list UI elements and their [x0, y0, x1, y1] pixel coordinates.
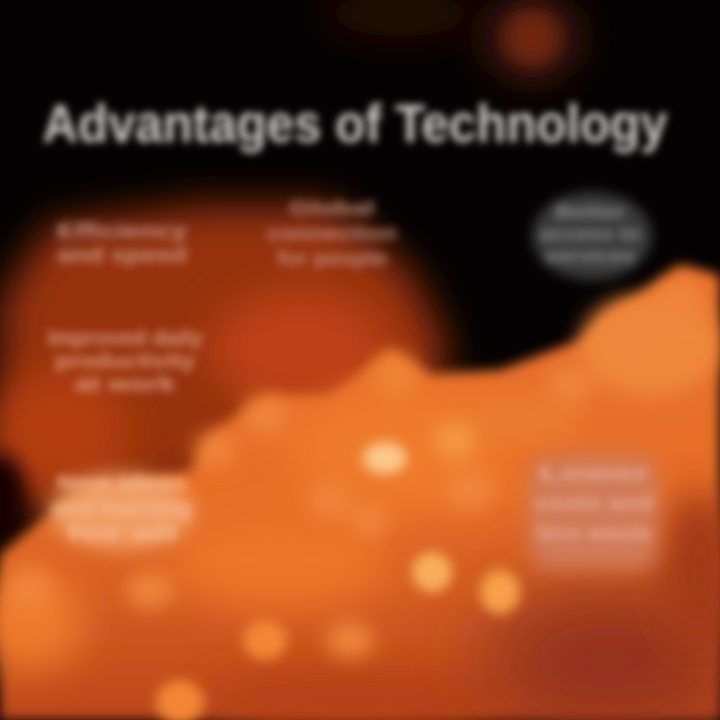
panel: advantage 5 [50, 472, 194, 550]
bright spots [156, 353, 520, 720]
panel: advantage 3 (grey circle): Better [555, 202, 625, 222]
glow: top sun [482, 0, 582, 83]
panel: advantage 4: at work [75, 373, 175, 396]
dark corner left [0, 455, 26, 545]
panel: advantage 5: New ideas [57, 472, 187, 495]
panel: advantage 3 (grey circle): access to [540, 224, 640, 244]
panel: advantage 2 [267, 198, 397, 270]
panel: advantage 1: and speed [57, 244, 187, 267]
panel: advantage 1 [57, 220, 187, 267]
mottled embers [8, 278, 704, 658]
title: Advantages of Technology [42, 94, 668, 154]
panel: advantage 4: Improved daily [48, 327, 203, 350]
panel: advantage 2: connection [267, 223, 397, 245]
panel: advantage 2: for people [277, 248, 387, 270]
panel: advantage 6: less waste [536, 522, 652, 545]
panel: advantage 6 [530, 455, 658, 570]
panel: advantage 6: costs and [534, 492, 654, 515]
panel: advantage 1: Efficiency [57, 220, 187, 243]
panel: advantage 5: and learning [52, 497, 192, 520]
panel: advantage 3 (grey circle) [532, 192, 652, 280]
orange fire mass [0, 265, 720, 720]
panel: advantage 2: Global [290, 198, 374, 220]
panel: advantage 4 [48, 327, 203, 396]
background: red glow behind upper panels [0, 0, 480, 520]
panel: advantage 5: for all [67, 522, 177, 545]
panel: advantage 3 (grey circle): services [545, 246, 635, 266]
panel: advantage 4: productivity [55, 350, 195, 373]
panel: advantage 6: Lower [539, 462, 649, 485]
